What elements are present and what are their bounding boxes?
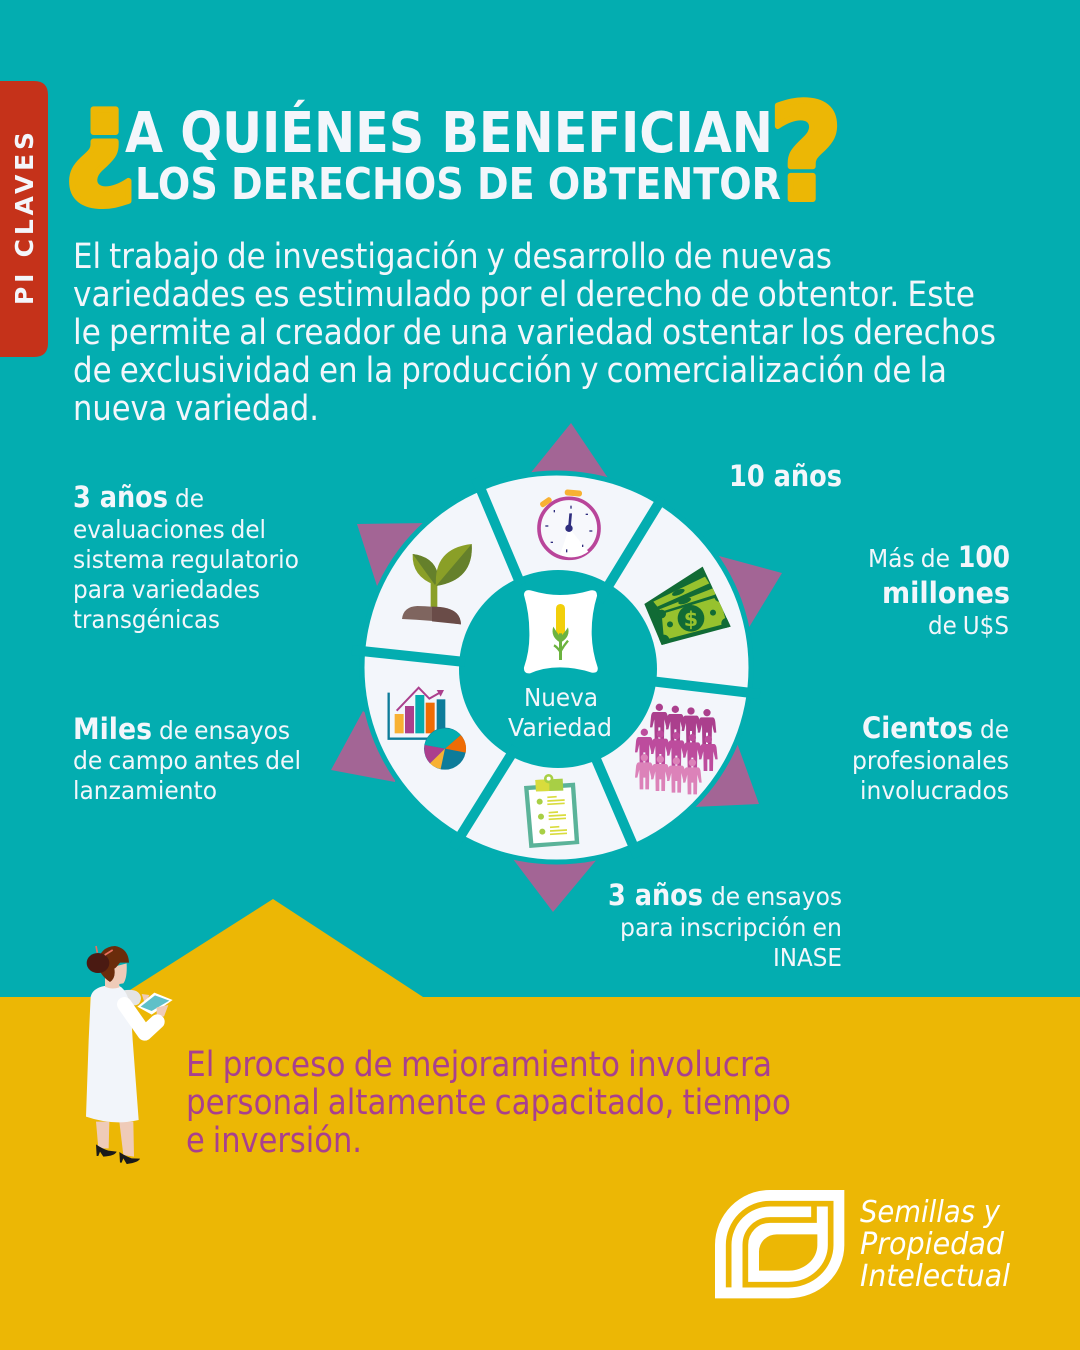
text: 3 años evaluaciones: para variedades (73, 575, 260, 604)
footer message: El proceso de mejoramiento involucra (186, 1045, 772, 1085)
logo text: Intelectual (860, 1259, 1011, 1294)
title: ¿ (63, 60, 137, 212)
text: Miles de ensayos: de campo antes del (73, 746, 301, 775)
logo text: Semillas y (860, 1195, 1001, 1230)
tab: PI CLAVES: PI CLAVES (10, 132, 39, 305)
text: Más de 100 millones: millones (882, 576, 1010, 610)
yellow footer panel (0, 899, 1080, 1350)
icon: money bills (644, 567, 732, 645)
text: 3 años evaluaciones (73, 480, 299, 634)
wheel (352, 470, 760, 864)
footer message (186, 1045, 791, 1161)
footer message: personal altamente capacitado, tiempo (186, 1083, 791, 1123)
text: 3 años de ensayos: para inscripción en (620, 913, 842, 942)
text: Más de 100 millones: de U$S (928, 611, 1009, 640)
text: Miles de ensayos: lanzamiento (73, 776, 217, 805)
text: 3 años de ensayos: 3 años (608, 878, 703, 912)
illustration: scientist (86, 946, 173, 1164)
text: Cientos de profesionales: involucrados (860, 776, 1009, 805)
intro text block: variedades es estimulado por el derecho de obtentor. Este (73, 275, 975, 315)
icon: people (635, 704, 718, 794)
logo text: Propiedad (860, 1227, 1005, 1262)
center label: Nueva Variedad (508, 683, 612, 742)
icon: sprout (402, 544, 472, 624)
intro text block: de exclusividad en la producción y comercialización de la (73, 351, 947, 391)
text: Más de 100 millones: 100 (958, 540, 1010, 574)
text: 3 años evaluaciones: sistema regulatorio (73, 545, 299, 574)
text: 3 años de ensayos: de ensayos (711, 882, 842, 911)
text: Cientos de profesionales: profesionales (852, 746, 1009, 775)
text: 3 años de ensayos (608, 878, 842, 972)
text: Miles de ensayos (73, 712, 301, 805)
tab: PI CLAVES (0, 81, 48, 357)
title: ? (769, 77, 842, 231)
text: Miles de ensayos: Miles (73, 712, 152, 746)
text: Cientos de profesionales: de (980, 715, 1009, 744)
icon: money bills: $ (684, 607, 698, 631)
title: A QUIÉNES BENEFICIAN (125, 100, 773, 166)
icon: charts (389, 688, 466, 770)
logo mark (715, 1190, 844, 1298)
icon: clipboard (524, 774, 579, 848)
text: Miles de ensayos: de ensayos (159, 716, 290, 745)
text: Cientos de profesionales: Cientos (862, 711, 973, 745)
title (63, 60, 843, 231)
text: 3 años evaluaciones: 3 años (73, 480, 168, 514)
text: 10 años: 10 años (729, 459, 842, 493)
text: Más de 100 millones: Más de (868, 544, 950, 573)
icon: stopwatch (539, 489, 599, 558)
text: 3 años de ensayos: INASE (773, 943, 842, 972)
purple triangles around wheel (331, 423, 782, 912)
text: Cientos de profesionales (852, 711, 1009, 805)
text: 3 años evaluaciones: transgénicas (73, 605, 220, 634)
footer message: e inversión. (186, 1121, 362, 1161)
intro text block (73, 237, 996, 429)
center label: Nueva Variedad: Variedad (508, 713, 612, 742)
text: Más de 100 millones (868, 540, 1010, 640)
center label: Nueva Variedad: Nueva (524, 683, 598, 712)
text: 3 años evaluaciones: evaluaciones del (73, 515, 266, 544)
intro text block: El trabajo de investigación y desarrollo de nuevas (73, 237, 832, 277)
title: LOS DERECHOS DE OBTENTOR (135, 160, 781, 210)
text: 3 años evaluaciones: de (175, 484, 204, 513)
icon: seed sack (524, 590, 598, 673)
logo text (860, 1195, 1011, 1294)
intro text block: le permite al creador de una variedad ostentar los derechos (73, 313, 996, 353)
intro text block: nueva variedad. (73, 389, 319, 429)
